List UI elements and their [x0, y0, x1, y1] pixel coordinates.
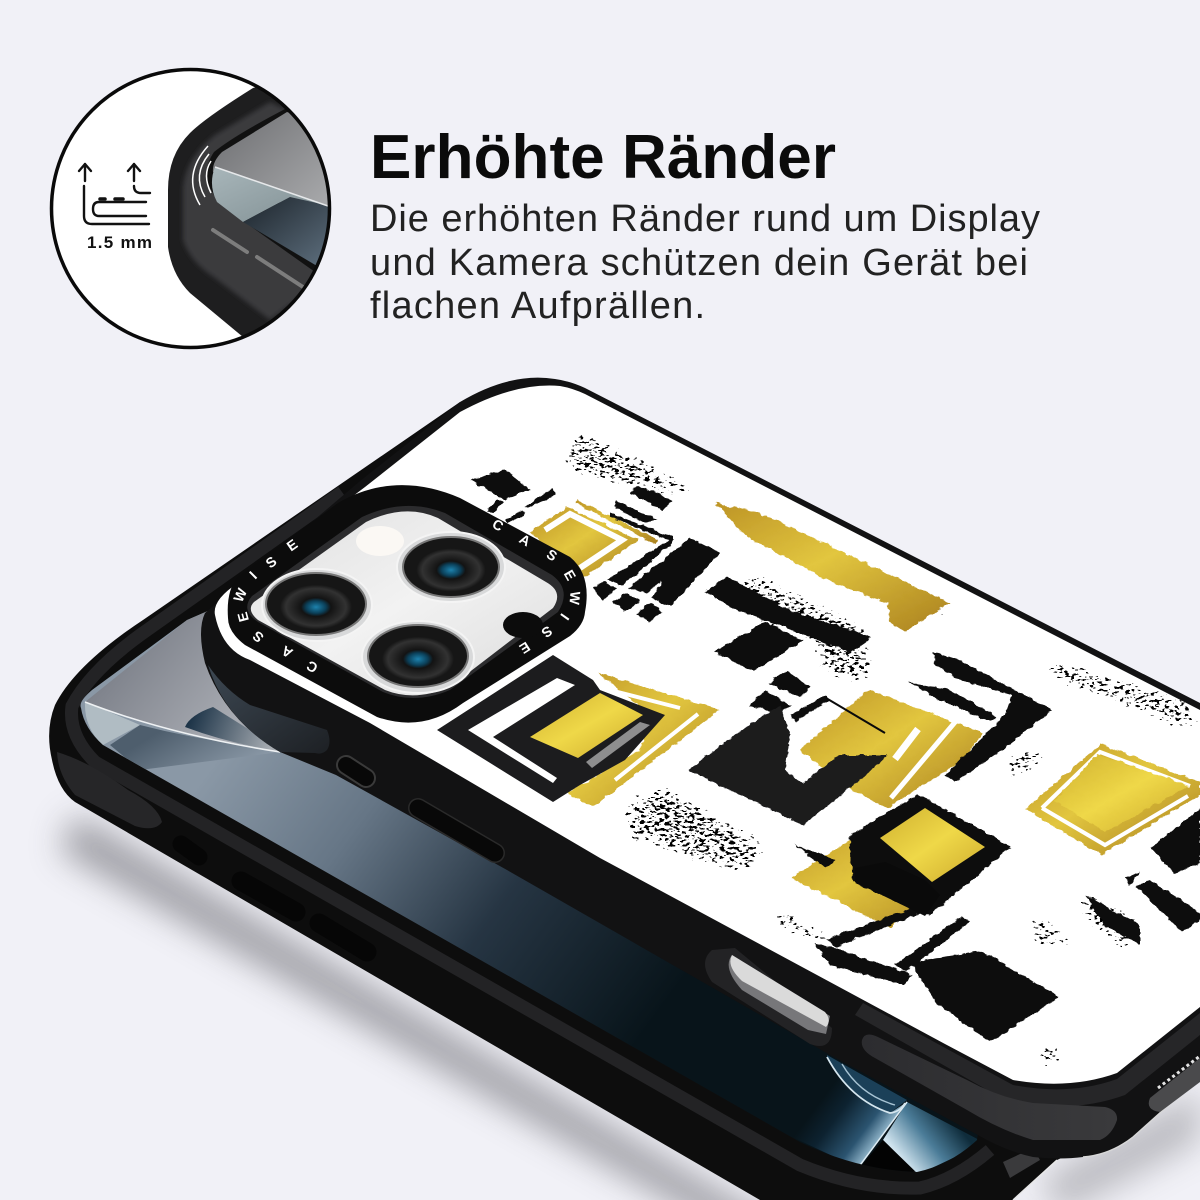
- lens bottom: [362, 621, 474, 693]
- soft shadow right of the phone corner: [1040, 1090, 1200, 1200]
- lower phone: screen: [80, 611, 978, 1172]
- icon label: 1.5 mm: 1.5 mm: [87, 233, 152, 252]
- CASEWISE ring lettering: E: [284, 536, 300, 554]
- CASEWISE ring lettering: C: [304, 658, 320, 676]
- lower phone: side buttons: [181, 844, 367, 952]
- CASEWISE ring lettering: E: [561, 567, 579, 583]
- CASEWISE ring lettering: [230, 516, 584, 676]
- carbon corner panel: [862, 1034, 1117, 1140]
- CASEWISE ring lettering: W: [230, 585, 250, 604]
- title: Erhöhte Ränder: [370, 123, 836, 192]
- CASEWISE ring lettering: W: [566, 591, 584, 606]
- upper phone: port and power button: [346, 765, 495, 853]
- black brush shapes: [470, 470, 1200, 1042]
- CASEWISE ring lettering: S: [544, 546, 560, 564]
- artwork: grunge gold and black pattern: [437, 420, 1200, 1075]
- CASEWISE ring lettering: C: [490, 516, 506, 534]
- white inner strokes on gold: [545, 514, 1190, 845]
- body text: flachen Aufprällen.: [370, 285, 705, 327]
- upper phone: white printed back: [215, 386, 1200, 1084]
- CASEWISE ring lettering: S: [262, 553, 280, 571]
- carbon panel by camera: [208, 665, 330, 754]
- sensor: [503, 612, 543, 638]
- lens left: [262, 569, 372, 641]
- black frame square with gold window: [437, 655, 665, 802]
- drop shadow under phones: [60, 815, 1020, 1200]
- lower phone port: [1003, 1148, 1040, 1178]
- CASEWISE ring lettering: E: [234, 610, 252, 624]
- upper phone: lightning port: [705, 948, 832, 1046]
- icon: 1.5 mm raised edge diagram: [79, 164, 150, 224]
- carbon side panel: [57, 752, 162, 828]
- body text: und Kamera schützen dein Gerät bei: [370, 242, 1028, 284]
- thin lines over the figure: [826, 698, 885, 733]
- CASEWISE ring lettering: I: [246, 568, 260, 582]
- lens top: [397, 532, 505, 602]
- body text: Die erhöhten Ränder rund um Display: [370, 198, 1040, 240]
- CASEWISE ring lettering: A: [279, 643, 295, 661]
- grunge speckle areas: [566, 435, 1198, 1066]
- CASEWISE ring lettering: E: [517, 639, 533, 657]
- gold shapes: [530, 500, 1200, 928]
- lower phone: black bumper: [49, 402, 1100, 1200]
- CASEWISE ring lettering: S: [249, 628, 267, 646]
- side speaker pill: [1149, 1058, 1200, 1112]
- gold centre panels: [1055, 754, 1189, 832]
- inset circle: raised edge detail: [52, 60, 340, 360]
- CASEWISE ring lettering: A: [517, 531, 533, 549]
- camera island: [228, 485, 587, 723]
- gold window in lower frame: [855, 808, 985, 916]
- CASEWISE ring lettering: S: [539, 623, 555, 641]
- camera ring: [228, 485, 587, 723]
- upper phone: black case: [201, 378, 1200, 1159]
- CASEWISE ring lettering: I: [557, 611, 573, 623]
- flash: [356, 526, 404, 556]
- inner bevel and glass: [247, 506, 564, 698]
